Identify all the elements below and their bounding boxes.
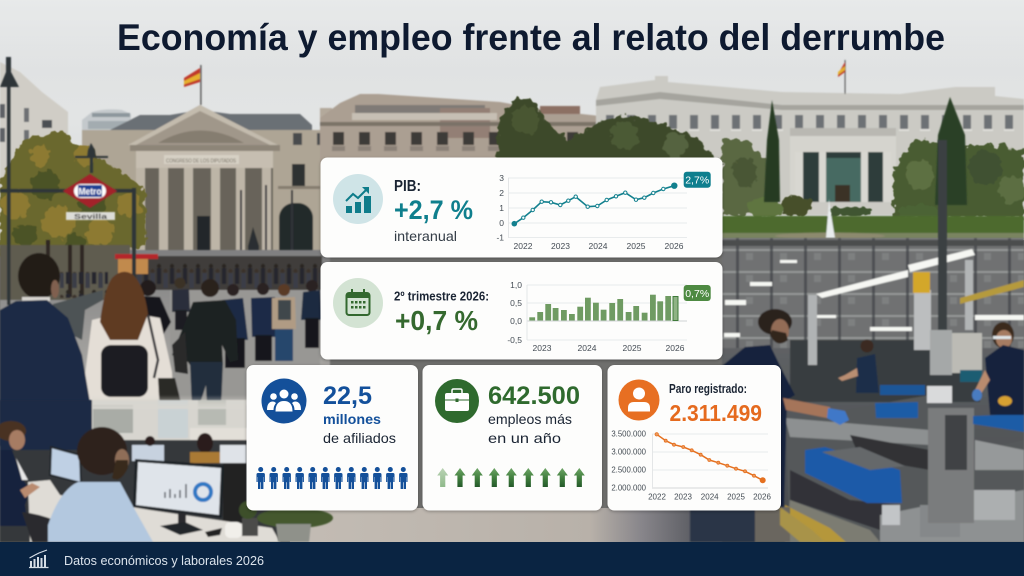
afiliados note: de afiliados [323, 430, 396, 446]
machinery bed [785, 395, 1024, 542]
plants and mug [205, 501, 258, 538]
PIB label: PIB: [394, 178, 421, 195]
line chart: PIB: -1 [496, 232, 504, 242]
foreground worker [722, 309, 849, 510]
panel: paro registrado [608, 365, 781, 510]
soft glow behind title [0, 0, 1024, 70]
sky [0, 0, 1024, 240]
background worker [838, 340, 879, 393]
factory scene [722, 140, 1024, 542]
flag on Congreso [184, 65, 202, 105]
afiliados value: 22,5 [323, 382, 372, 410]
empleos note: en un año [488, 430, 561, 446]
pictogram: people row [256, 467, 407, 489]
main monitor [133, 459, 224, 535]
right trees [722, 140, 1024, 218]
empleos value: 642.500 [488, 382, 580, 410]
PIB value: +2,7 % [394, 195, 473, 225]
desk [28, 480, 280, 542]
Congreso building: CONGRESO DE LOS DIPUTADOS [166, 158, 236, 164]
icon: people group [262, 378, 306, 424]
footer text: Datos económicos y laborales 2026 [64, 553, 264, 568]
right worker [972, 322, 1024, 415]
left office worker [0, 421, 40, 526]
badge: 0,7%: 0,7% [685, 288, 709, 300]
badge: 0,7% [684, 285, 711, 301]
line chart: PIB: 1 [499, 203, 504, 213]
icon: briefcase [435, 379, 479, 423]
yellow box [913, 272, 930, 293]
line chart: paro: 2022 [648, 492, 666, 502]
bar chart: quarterly: 2026 [666, 343, 685, 353]
lamp posts and metro gantry [0, 57, 136, 305]
line chart: paro: 2023 [674, 492, 692, 502]
panel: quarterly growth [320, 262, 722, 360]
ceiling lights [724, 249, 1024, 337]
left apartment building [0, 62, 68, 240]
far crowd [60, 256, 322, 298]
main office worker [48, 427, 153, 542]
line chart: PIB: 2022 [514, 241, 533, 251]
background monitors and workers [50, 433, 246, 523]
palace conifers [764, 100, 780, 202]
metro sign: Sevilla [74, 212, 108, 221]
panel: empleos [422, 365, 602, 510]
line chart: PIB: 0 [499, 218, 504, 228]
line chart: PIB: 2 [499, 188, 504, 198]
line chart: PIB: 3 [499, 173, 504, 183]
flag on palace [838, 60, 846, 94]
quarter label: 2º trimestre 2026: [394, 290, 489, 304]
bar chart: quarterly: 2023 [533, 343, 552, 353]
PIB note: interanual [394, 228, 457, 244]
line chart: PIB [496, 173, 687, 251]
title: Economía y empleo frente al relato del derrumbe [117, 17, 945, 58]
bar chart: quarterly: -0,5 [507, 335, 522, 345]
bar chart: quarterly: 2024 [578, 343, 597, 353]
garden shrubs [748, 196, 942, 219]
trees in the middle [498, 98, 722, 165]
man in black jacket [172, 279, 238, 410]
bar chart: quarterly [507, 280, 687, 353]
Congreso building [82, 105, 332, 275]
bar chart: quarterly: 1,0 [510, 280, 522, 290]
man in navy suit [0, 253, 93, 446]
red kiosk [115, 254, 158, 274]
chair [22, 512, 95, 542]
icon: person [618, 380, 660, 420]
badge: 2,7%: 2,7% [685, 174, 709, 186]
line chart: paro: 2026 [753, 492, 771, 502]
empleos note [488, 411, 572, 446]
palace building on the right [596, 76, 1024, 215]
panel: PIB [320, 158, 722, 258]
large potted plant [257, 508, 333, 542]
empleos note: empleos más [488, 411, 572, 427]
round building behind [82, 109, 131, 132]
autumn trees [0, 130, 146, 258]
icon: growth chart [333, 174, 383, 224]
tree trunks [46, 240, 84, 297]
walking people mid distance [140, 278, 322, 368]
line chart: paro: 2.500.000 [611, 466, 647, 474]
blue crates [805, 370, 1024, 503]
line chart: paro: 3.500.000 [611, 430, 647, 438]
metro sign [63, 174, 117, 221]
office windows [93, 400, 248, 440]
metal railing [53, 290, 103, 340]
congress inscription [164, 155, 239, 164]
line chart: paro: 2024 [701, 492, 719, 502]
afiliados unit: millones [323, 411, 381, 427]
paro value: 2.311.499 [670, 400, 762, 426]
factory columns [808, 260, 1024, 365]
line chart: PIB: 2024 [589, 241, 608, 251]
footer chart icon [29, 550, 48, 568]
line chart: PIB: 2023 [551, 241, 570, 251]
lower legs of foreground worker [690, 507, 825, 542]
garden hedge and fountain [722, 97, 1024, 240]
quarter value: +0,7 % [395, 305, 478, 336]
line chart: paro: 3.000.000 [611, 448, 647, 456]
bar chart: quarterly: 2025 [623, 343, 642, 353]
line chart: PIB: 2026 [665, 241, 684, 251]
line chart: paro: 2025 [727, 492, 745, 502]
footer bar [0, 542, 1024, 576]
machine column with pole [927, 140, 982, 523]
badge: 2,7% [684, 172, 711, 188]
paro label: Paro registrado: [669, 382, 747, 396]
pictogram: arrows row [437, 468, 585, 487]
woman with backpack [85, 272, 184, 415]
bar chart: quarterly: 0,0 [510, 316, 522, 326]
bar chart: quarterly: 0,5 [510, 298, 522, 308]
panel: afiliados [246, 365, 418, 510]
street plaza with crowd [0, 57, 330, 446]
floor band under centre cards [290, 508, 690, 542]
office scene [0, 395, 290, 542]
dark machinery depth band [790, 340, 980, 402]
icon: calendar [333, 278, 383, 328]
metro sign: Metro [78, 186, 102, 196]
line chart: paro [611, 430, 771, 502]
line chart: paro: 2.000.000 [611, 484, 647, 492]
Madrid street scene [0, 60, 1024, 275]
foliage [0, 98, 1024, 258]
middle apartment building [320, 94, 600, 165]
line chart: PIB: 2025 [627, 241, 646, 251]
